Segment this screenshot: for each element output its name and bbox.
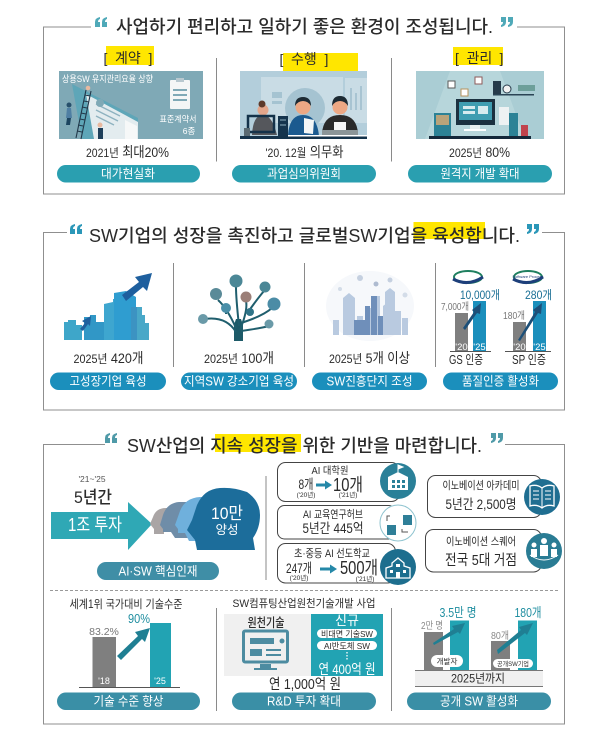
bar chart: technology level: '18	[98, 676, 110, 686]
illustration: execution	[240, 71, 367, 139]
pill: technology level: 기술 수준 향상	[94, 694, 164, 708]
card: AI leading schools: ('21년)	[356, 574, 374, 583]
box: new technology: 신규	[335, 613, 359, 628]
arrow: 1 trillion investment	[51, 502, 152, 550]
bar chart: open SW: 80개	[491, 630, 509, 642]
column: execution	[232, 51, 376, 182]
card: innovation academy: 5년간 2,500명	[446, 497, 516, 512]
GS certification chart: 10,000개	[460, 288, 500, 302]
block: talent investment	[51, 474, 260, 580]
panel 2 border	[44, 232, 564, 410]
SP certification chart: '20	[513, 342, 526, 353]
panel: business environment	[44, 17, 564, 194]
GS certification chart: '25	[473, 342, 486, 353]
illustration: contract: 상용SW 유지관리요율 상향	[62, 73, 153, 84]
band: until 2025: 2025년까지	[451, 672, 505, 686]
icon: growing heads: 10만	[211, 504, 243, 523]
bar chart: open SW: 180개	[514, 605, 542, 620]
bar chart: technology level: 83.2%	[89, 626, 119, 638]
column: quality certification	[441, 271, 558, 390]
icon: school	[380, 549, 416, 585]
pill: contract	[57, 165, 200, 182]
pill: technology level	[57, 692, 200, 710]
bar chart: open SW: 2만 명	[421, 620, 443, 632]
band: until 2025	[415, 670, 543, 686]
icon: research hub	[380, 505, 416, 541]
pill: R&D investment	[232, 692, 376, 710]
card: AI graduate school: AI 대학원	[312, 465, 348, 477]
person left	[258, 104, 268, 116]
bar chart: technology level: '25	[154, 676, 166, 686]
pill: management: 원격지 개발 확대	[440, 167, 520, 181]
panel 3 border	[44, 444, 564, 724]
pill: regional firms: 지역SW 강소기업 육성	[184, 374, 294, 388]
card: AI leading schools: 500개	[340, 558, 378, 578]
column: management: ]	[500, 50, 503, 66]
pill: core talent	[97, 562, 219, 580]
SP certification chart: SP 인증	[512, 353, 546, 367]
icon: university	[380, 463, 416, 499]
column: execution: 수행	[291, 51, 317, 67]
bar chart: open SW	[421, 605, 542, 670]
SP certification chart: '25	[533, 342, 546, 353]
pill: open SW: 공개 SW 활성화	[440, 694, 518, 708]
box: core technology: 원천기술	[248, 615, 284, 630]
pill: core talent: AI·SW 핵심인재	[118, 564, 198, 578]
column: contract	[57, 46, 203, 182]
column: management: [	[455, 50, 459, 66]
icon: rising buildings	[64, 273, 152, 340]
box: new technology	[311, 613, 383, 677]
icon: growing heads: 양성	[215, 523, 239, 537]
GS certification chart	[441, 271, 500, 367]
card: AI education research hub	[278, 505, 416, 541]
card: innovation square: 이노베이션 스퀘어	[446, 535, 516, 548]
SP certification chart: 280개	[525, 288, 552, 302]
pill: open SW	[407, 692, 551, 710]
card: AI education research hub: 5년간 445억	[302, 521, 364, 536]
icon: growing heads	[150, 488, 260, 550]
column: R&D investment: SW컴퓨팅산업원천기술개발 사업	[232, 596, 376, 610]
panel 1 border	[44, 27, 564, 194]
column: management	[408, 47, 552, 182]
column: execution: [	[280, 51, 284, 67]
icon: city skyline	[326, 271, 414, 341]
icon: people	[526, 533, 562, 569]
caption: contract: 2021년 최대20%	[86, 144, 169, 160]
column: regional firms	[181, 274, 297, 390]
icon: technology tree	[198, 274, 280, 341]
panel 2 title: SW기업의 성장을 촉진하고 글로벌SW기업을 육성합니다.	[89, 226, 520, 246]
panel 3 title: SW산업의 지속 성장을 위한 기반을 마련합니다.	[127, 436, 482, 456]
card: AI graduate school: ('20년)	[297, 490, 315, 499]
illustration: contract: 6종	[183, 126, 195, 136]
caption: high-growth firms: 2025년 420개	[74, 350, 144, 366]
GS certification chart: 7,000개	[441, 301, 469, 313]
card: AI graduate school: 10개	[333, 475, 363, 495]
illustration: contract	[59, 71, 203, 139]
illustration: management	[416, 71, 544, 139]
card: innovation square: 전국 5대 거점	[445, 552, 517, 569]
bar chart: technology level: 90%	[128, 611, 150, 626]
person right	[332, 100, 348, 114]
column: contract: ]	[148, 50, 152, 66]
card: AI leading schools: ('20년)	[290, 573, 308, 582]
icon: book	[524, 479, 560, 515]
column: technology level: 세계1위 국가대비 기술수준	[70, 598, 182, 611]
card: AI leading schools: 247개	[286, 561, 312, 576]
column: open SW	[407, 605, 551, 710]
GS certification chart: '20	[455, 342, 468, 353]
pill: management	[408, 165, 552, 182]
bar chart: open SW: 3.5만 명	[440, 605, 476, 620]
box: core technology	[224, 614, 311, 676]
pill: execution: 과업심의위원회	[267, 167, 341, 181]
pill: execution	[232, 165, 376, 182]
column: contract: 계약	[115, 50, 141, 66]
caption: execution: '20. 12월 의무화	[266, 144, 344, 160]
SP certification chart: 180개	[503, 310, 525, 322]
pill: high-growth firms: 고성장기업 육성	[70, 374, 146, 388]
card: innovation square	[426, 530, 562, 572]
panel: SW company growth	[44, 222, 564, 410]
card: innovation academy: 이노베이션 아카데미	[442, 479, 520, 492]
block: talent investment: 5년간	[74, 488, 112, 507]
bar chart: open SW: 공개SW기업	[497, 659, 529, 668]
caption: management: 2025년 80%	[449, 144, 510, 160]
person centre	[296, 100, 310, 114]
box: new technology: 비대면 기술SW	[321, 629, 373, 639]
pill: contract: 대가현실화	[101, 167, 155, 181]
pill: R&D investment: R&D 투자 확대	[267, 694, 341, 708]
box: new technology: 연 400억 원	[318, 661, 376, 677]
pill: promotion complex: SW진흥단지 조성	[326, 374, 412, 388]
caption: promotion complex: 2025년 5개 이상	[329, 350, 410, 366]
column: high-growth firms	[50, 273, 166, 390]
card: AI graduate school: 8개	[298, 477, 314, 492]
bar chart: open SW: 개발자	[437, 656, 457, 666]
column: R&D investment: 연 1,000억 원	[269, 676, 341, 693]
SP certification chart	[503, 271, 552, 367]
column: contract: [	[104, 50, 108, 66]
card: AI education research hub: AI 교육연구허브	[303, 508, 363, 521]
card: AI graduate school: ('21년)	[339, 490, 357, 499]
illustration: contract: 표준계약서	[160, 114, 196, 124]
panel: sustained growth foundation	[44, 433, 564, 724]
column: management: 관리	[466, 50, 492, 66]
column: technology level	[57, 598, 200, 710]
column: promotion complex	[312, 271, 427, 390]
column: execution: ]	[324, 51, 328, 67]
GS certification chart: GS 인증	[449, 353, 483, 367]
pill: quality certification: 품질인증 활성화	[462, 374, 539, 388]
panel 1 title: 사업하기 편리하고 일하기 좋은 환경이 조성됩니다.	[116, 17, 493, 37]
box: new technology: AI반도체 SW	[324, 641, 370, 651]
card: AI leading schools: 초·중등 AI 선도학교	[294, 547, 370, 560]
arrow: 1 trillion investment: 1조 투자	[68, 515, 122, 535]
card: innovation academy	[428, 476, 560, 518]
card: AI leading schools	[278, 544, 416, 585]
block: talent investment: '21~'25	[78, 474, 106, 484]
column: R&D investment	[224, 596, 383, 710]
bar chart: technology level	[79, 611, 180, 688]
card: AI graduate school	[278, 462, 416, 502]
caption: regional firms: 2025년 100개	[204, 350, 274, 366]
SP certification chart: Software Process	[512, 274, 544, 279]
